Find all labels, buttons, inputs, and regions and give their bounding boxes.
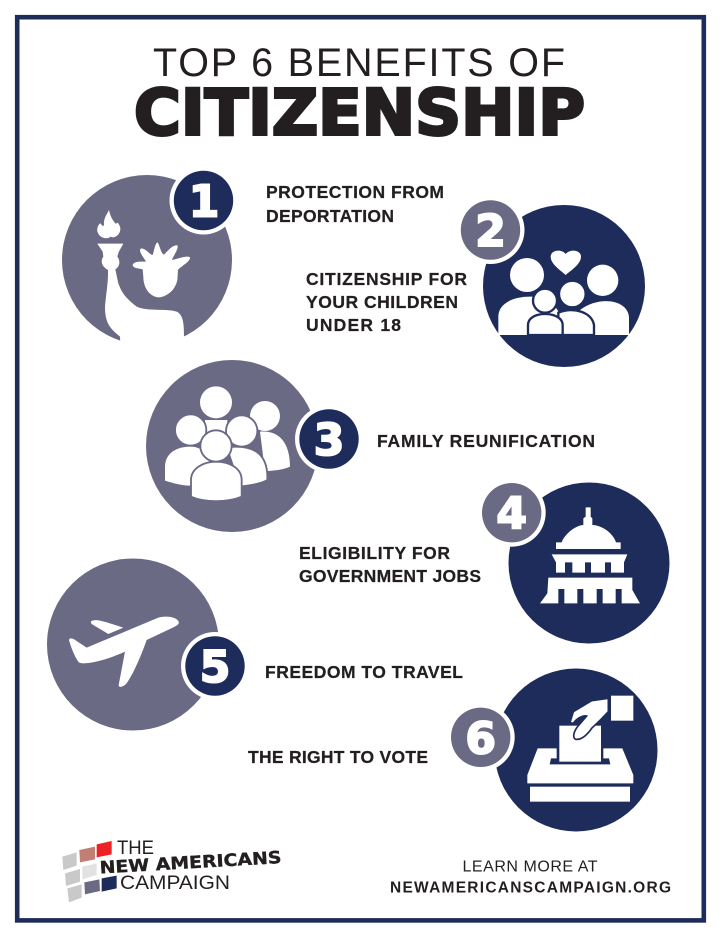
logo: The New Americans Campaign: [62, 837, 282, 902]
circle 2: [483, 205, 645, 367]
icon: capitol building: [540, 507, 640, 603]
logo wordmark: THE: [117, 837, 154, 859]
number badge 2: [456, 196, 524, 264]
panel: benefit 6 right to vote: [248, 668, 658, 832]
label 1: DEPORTATION: [266, 206, 394, 226]
label 5: FREEDOM TO TRAVEL: [265, 662, 463, 682]
number badge 5: [181, 632, 249, 700]
number badge 4: 4: [496, 489, 527, 540]
circle 1: [62, 175, 232, 345]
panel: benefit 3 family reunification: [146, 360, 595, 532]
call to action: website: NEWAMERICANSCAMPAIGN.ORG: [390, 880, 671, 896]
label 2: [306, 269, 467, 335]
number badge 3: [295, 405, 363, 473]
logo wordmark: [99, 837, 282, 894]
number badge 6: [447, 703, 515, 771]
icon: airplane: [69, 617, 179, 687]
number badge 5: 5: [200, 642, 230, 693]
icon: statue of liberty: [97, 210, 190, 350]
call to action: website: [390, 858, 671, 896]
circle 6: [494, 668, 658, 832]
label 6: THE RIGHT TO VOTE: [248, 747, 428, 767]
number badge 6: 6: [465, 713, 496, 764]
circle 3: [146, 360, 318, 532]
label 1: PROTECTION FROM: [266, 182, 444, 202]
logo squares: [62, 841, 117, 902]
label 2: YOUR CHILDREN: [306, 292, 458, 312]
title: CITIZENSHIP: [134, 76, 585, 150]
logo wordmark: CAMPAIGN: [120, 872, 230, 894]
panel: benefit 5 freedom to travel: [47, 558, 463, 730]
number badge 1: [170, 166, 238, 234]
circle 5: [47, 558, 219, 730]
panel: benefit 1 protection from deportation: [62, 166, 444, 350]
title: TOP 6 BENEFITS OF: [153, 41, 565, 85]
number badge 4: [478, 479, 546, 547]
label 4: ELIGIBILITY FOR: [299, 543, 450, 563]
circle 4: [508, 482, 670, 644]
icon: group of people: [165, 386, 290, 501]
number badge 2: 2: [475, 206, 506, 257]
label 3: FAMILY REUNIFICATION: [377, 431, 595, 451]
number badge 3: 3: [314, 415, 344, 466]
label 4: GOVERNMENT JOBS: [299, 566, 481, 586]
label 1: [266, 182, 444, 226]
number badge 1: 1: [189, 176, 219, 228]
icon: ballot box: [527, 696, 633, 802]
label 2: CITIZENSHIP FOR: [306, 269, 467, 289]
icon: family: [498, 251, 629, 335]
title: [134, 41, 585, 150]
call to action: website: LEARN MORE AT: [462, 858, 598, 876]
logo wordmark: NEW AMERICANS: [99, 848, 282, 878]
label 2: UNDER 18: [306, 315, 401, 335]
label 4: [299, 543, 481, 586]
panel: benefit 4 government jobs: [299, 479, 670, 644]
panel: benefit 2 citizenship for children: [306, 196, 645, 367]
